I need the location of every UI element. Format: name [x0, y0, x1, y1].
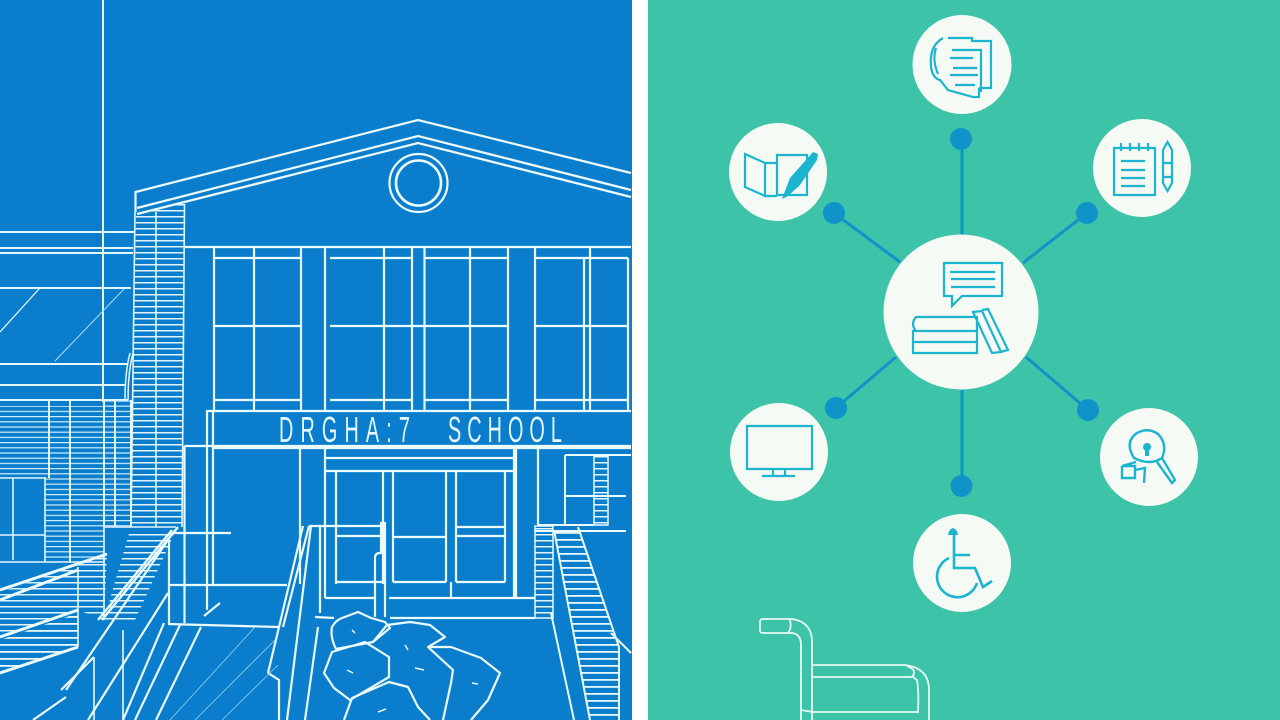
panel: accessibility network — [648, 0, 1280, 720]
icon: magnifier and keyhole — [1122, 430, 1175, 483]
entrance and doors — [168, 410, 631, 627]
icon: pencil — [1163, 142, 1172, 191]
node: notepad and pencil — [1093, 119, 1191, 217]
sign text — [279, 411, 568, 451]
icon: speech bubble — [944, 263, 1002, 306]
icon: open book — [745, 154, 807, 196]
icon: books — [913, 309, 1008, 353]
panel: school blueprint — [0, 0, 632, 720]
brick tower — [131, 203, 184, 527]
sign text: SCHOOL — [448, 411, 568, 451]
node: magnifier — [1100, 408, 1198, 506]
sign text: DRGHA:7 — [279, 411, 417, 451]
node: monitor — [730, 403, 828, 501]
icon: notepad — [1114, 143, 1155, 195]
white outline chair — [760, 619, 929, 720]
icon: monitor — [747, 426, 812, 476]
school sign band — [207, 411, 631, 451]
hub: books and speech bubble — [884, 234, 1038, 390]
node: wheelchair — [913, 514, 1011, 612]
left wing of building — [0, 0, 176, 562]
icon: wheelchair symbol — [937, 535, 992, 597]
icon: pen — [782, 152, 818, 199]
windows — [185, 247, 631, 410]
roof and round window — [136, 120, 631, 214]
left ramps and railings — [0, 527, 278, 720]
node: open book and pen — [729, 123, 827, 221]
right wing and stairs — [535, 455, 631, 720]
rocks — [324, 612, 500, 720]
central railing and post — [268, 523, 385, 720]
node: research documents — [912, 15, 1012, 114]
icon: books and head — [931, 38, 991, 97]
connector lines and dots — [823, 128, 1099, 497]
